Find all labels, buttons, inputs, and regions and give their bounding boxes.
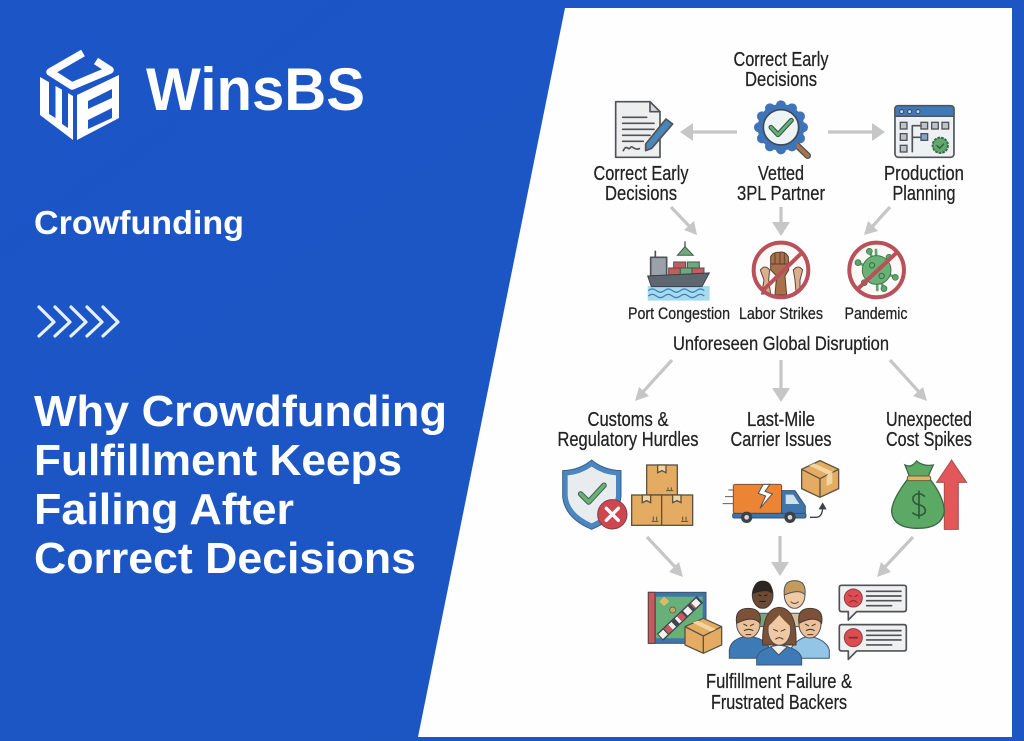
label: Production Planning: Planning <box>892 183 956 205</box>
label: Customs and Regulatory Hurdles: Regulatory Hurdles <box>558 429 698 451</box>
icon: chevrons <box>39 307 118 336</box>
logo wordmark: WinsBS <box>146 56 365 123</box>
person: front right <box>790 608 829 658</box>
heading: Correct Early Decisions top <box>734 49 828 91</box>
icon: broken delivery truck <box>723 461 839 523</box>
label: Correct Early Decisions <box>594 163 688 205</box>
title: Correct Decisions <box>34 534 416 583</box>
icon: container ship <box>648 241 710 301</box>
arrow: cost to failure <box>877 537 913 577</box>
label: Fulfillment Failure and Frustrated Backers: Fulfillment Failure & <box>706 671 853 693</box>
label: Vetted 3PL Partner <box>737 163 825 205</box>
label: Customs and Regulatory Hurdles: Customs & <box>588 409 669 431</box>
label: Labor Strikes: Labor Strikes <box>739 305 823 323</box>
person: back left <box>750 581 775 627</box>
label: Customs and Regulatory Hurdles <box>558 409 698 451</box>
icon: pandemic prohibited <box>849 242 904 298</box>
label: Last-Mile Carrier Issues <box>730 409 832 451</box>
label: Vetted 3PL Partner: 3PL Partner <box>737 183 825 205</box>
label: Pandemic: Pandemic <box>844 305 908 323</box>
icon: money bag with up arrow <box>892 460 967 529</box>
label: Unexpected Cost Spikes: Unexpected <box>886 409 972 431</box>
title: Failing After <box>34 485 294 534</box>
logo: WinsBS cube icon <box>40 53 119 140</box>
heading: Correct Early Decisions top: Decisions <box>745 69 817 91</box>
label: Correct Early Decisions: Correct Early <box>594 163 688 185</box>
icon: labor strikes prohibited <box>753 242 809 298</box>
label: Port Congestion: Port Congestion <box>628 305 730 323</box>
person: front centre <box>757 607 802 665</box>
label: Fulfillment Failure and Frustrated Backers: Frustrated Backers <box>711 692 847 714</box>
arrow: disruption to customs <box>635 360 672 401</box>
arrow: planning to pandemic <box>864 207 890 235</box>
label: Production Planning: Production <box>884 163 964 185</box>
arrow: badge to document <box>680 123 737 141</box>
label: Last-Mile Carrier Issues: Last-Mile <box>747 409 815 431</box>
label: Unexpected Cost Spikes: Cost Spikes <box>886 429 972 451</box>
title <box>34 387 447 583</box>
heading: Unforeseen Global Disruption: Unforeseen Global Disruption <box>673 334 889 355</box>
label: Last-Mile Carrier Issues: Carrier Issues <box>730 429 832 451</box>
label: Unexpected Cost Spikes <box>886 409 972 451</box>
heading: Correct Early Decisions top: Correct Early <box>734 49 828 71</box>
arrow: badge to planning <box>828 123 885 141</box>
title: Fulfillment Keeps <box>34 436 402 485</box>
panel: white flow diagram <box>418 8 1012 737</box>
icon: document and pen <box>616 102 673 157</box>
arrow: decisions to port congestion <box>671 207 697 235</box>
icon: shield and boxes <box>563 460 693 529</box>
arrow: disruption to carrier <box>772 360 790 402</box>
icon: negative review bubbles <box>839 585 906 659</box>
label: Fulfillment Failure and Frustrated Backers <box>706 671 853 714</box>
arrow: carrier to failure <box>771 536 789 576</box>
arrow: disruption to cost <box>890 360 927 401</box>
person: front left <box>729 608 770 658</box>
category label: Crowfunding <box>34 204 244 241</box>
label: Production Planning <box>884 163 964 205</box>
arrow: customs to failure <box>647 537 683 577</box>
title: Why Crowdfunding <box>34 387 447 436</box>
icon: vetted badge with magnifier <box>754 100 808 156</box>
icon: production planning window <box>895 106 954 157</box>
label: Correct Early Decisions: Decisions <box>605 183 677 205</box>
arrow: partner to labor strikes <box>772 207 790 236</box>
label: Vetted 3PL Partner: Vetted <box>758 163 804 185</box>
icon: board game and box <box>648 592 722 653</box>
person: back right <box>784 581 807 627</box>
icon: frustrated backers group <box>729 581 829 665</box>
